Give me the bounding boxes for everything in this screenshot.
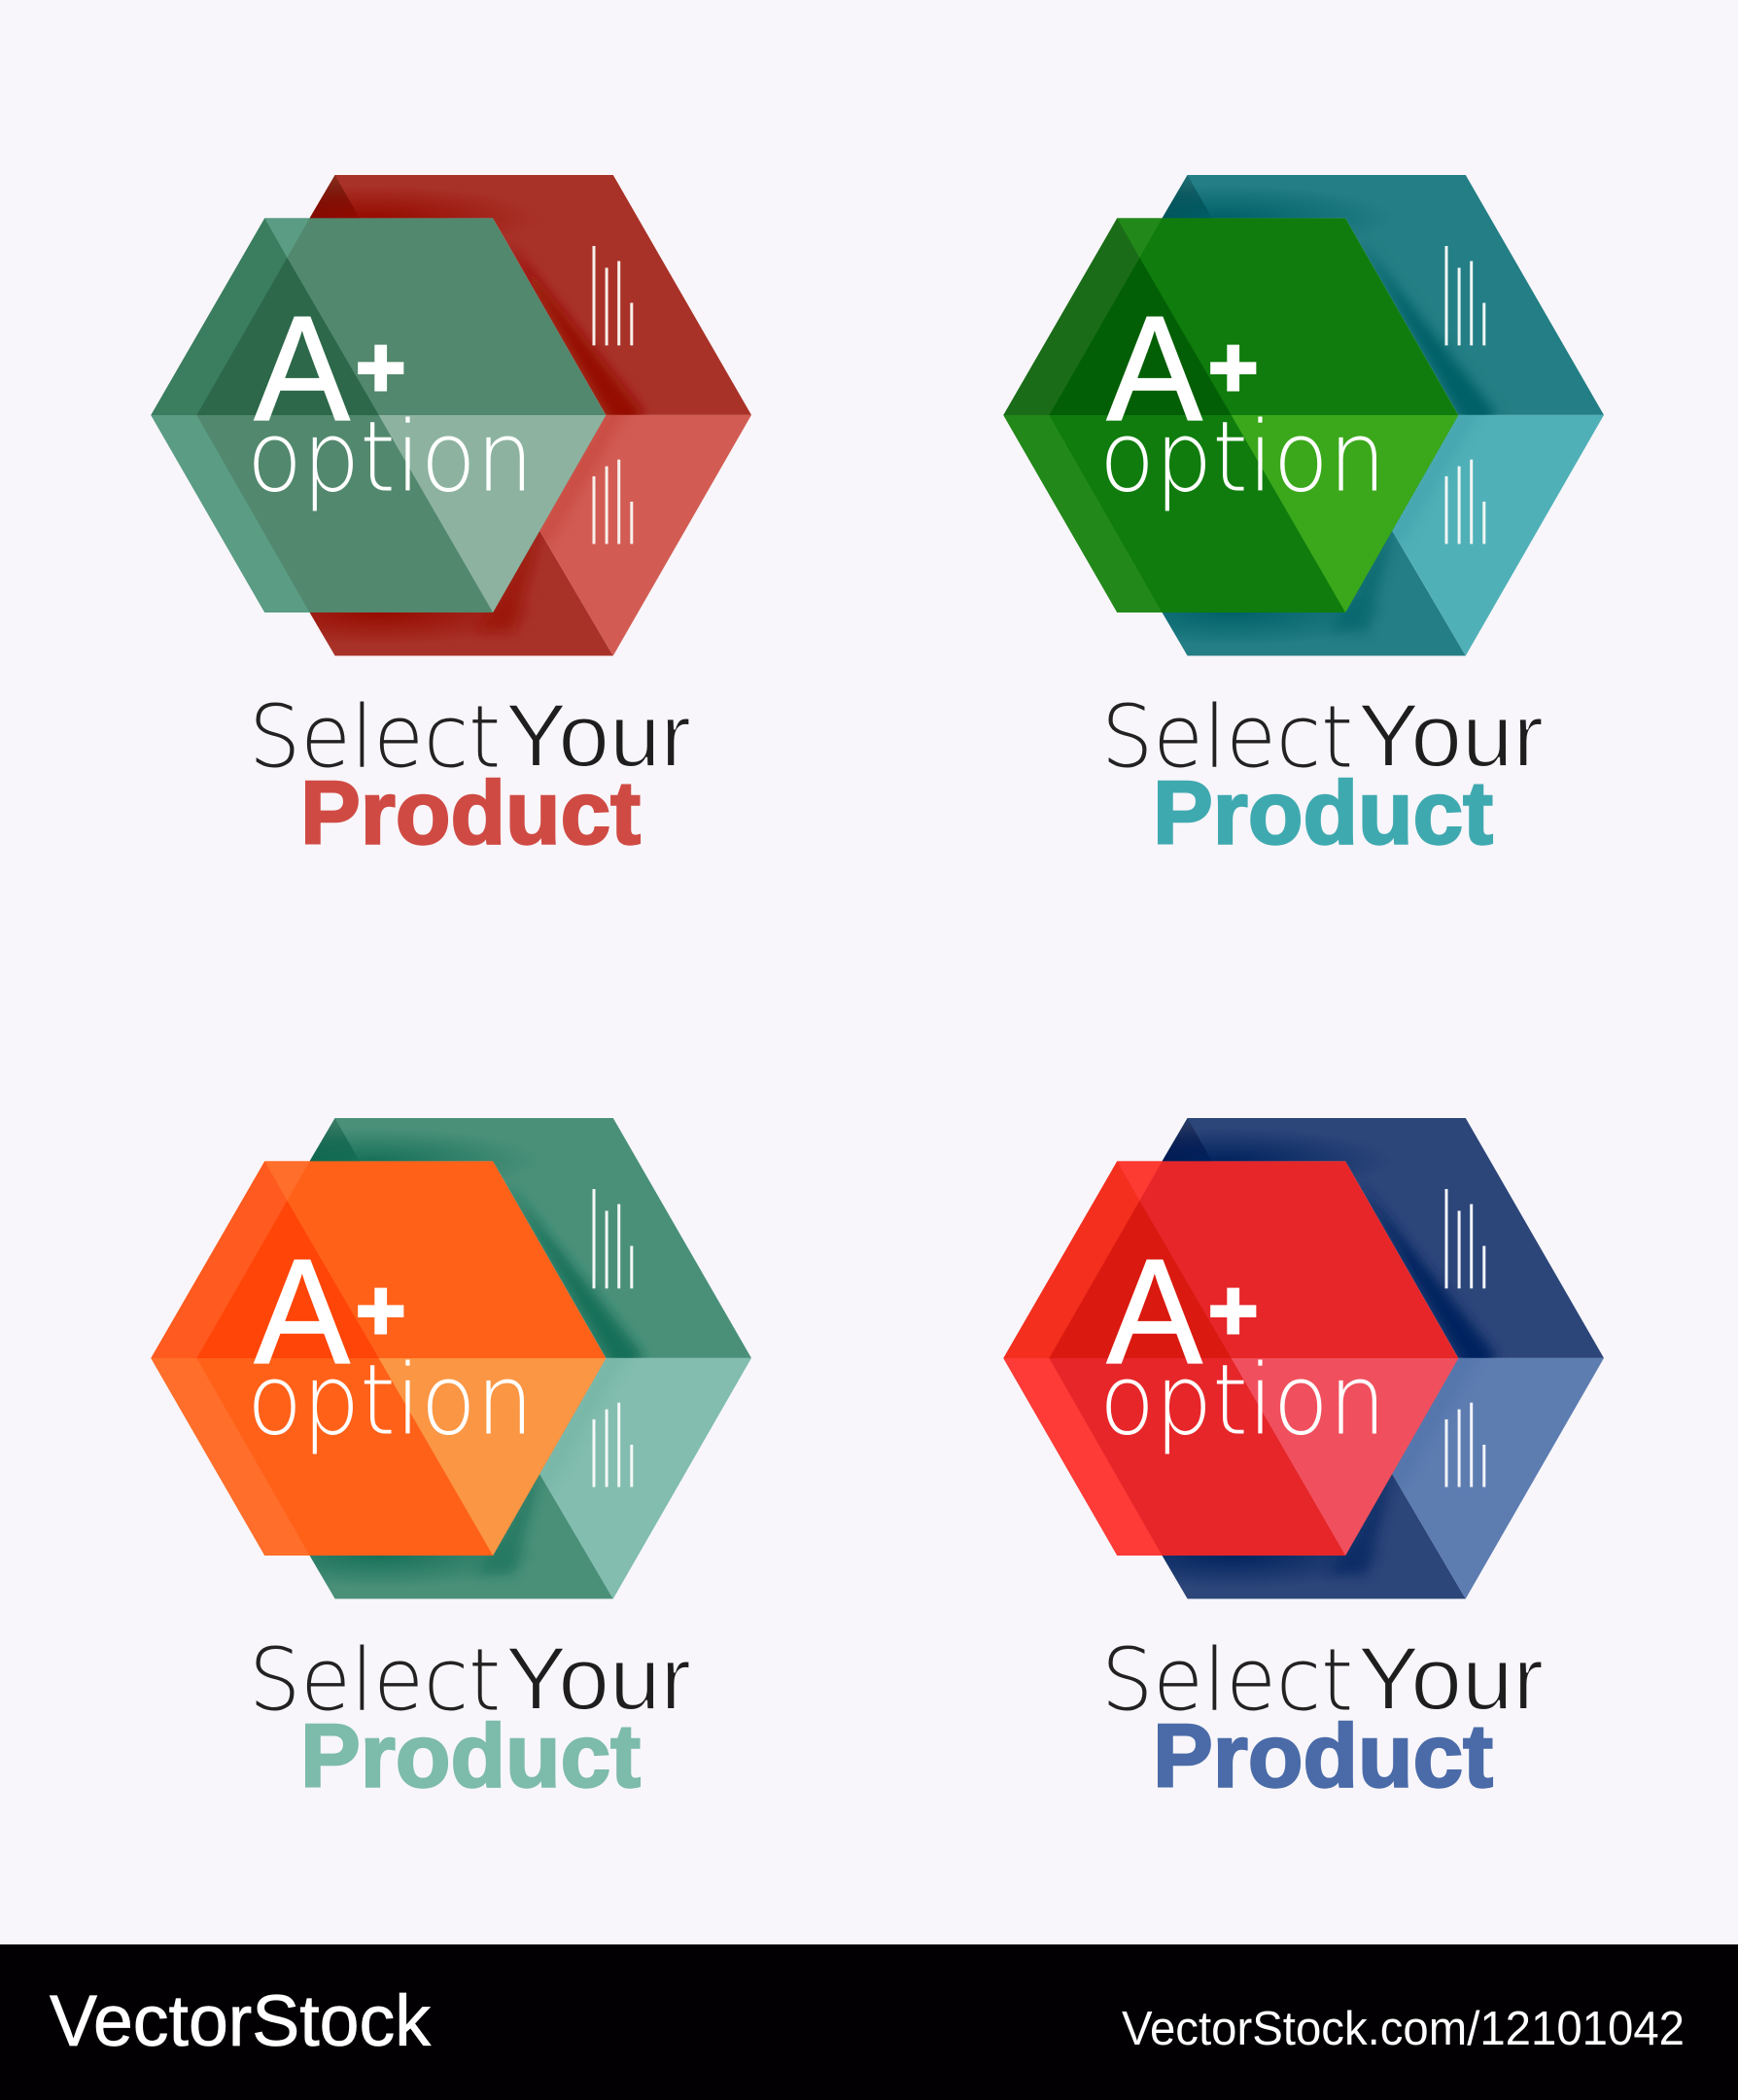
front hexagon [1003,218,1458,612]
front hexagon [151,218,606,612]
heading: Select Your [249,686,691,788]
option label: option [247,1343,534,1456]
option label: option [247,400,534,513]
icon: upper bar lines [593,1189,633,1288]
panel: red and green hexagon option [151,175,751,862]
back hexagon [1163,1118,1604,1598]
icon: lower bar lines [593,1403,633,1488]
heading: Select Your [1101,1629,1544,1731]
icon: upper bar lines [1444,1189,1485,1288]
A+ mark: A [255,1229,350,1395]
icon: lower bar lines [593,460,633,544]
icon: lower bar lines [1444,460,1485,544]
A+ mark: A [255,286,350,452]
A+ mark [255,286,405,452]
back hexagon [310,175,751,655]
A+ mark: + [356,319,405,415]
icon: lower bar lines [1444,1403,1485,1488]
option label: option [1099,400,1386,513]
heading: Select Your: Select [1101,687,1353,788]
heading: Select Your: Select [1101,1630,1353,1731]
heading: Select Your [249,1629,691,1731]
panel: teal and green hexagon option [1003,175,1604,862]
heading: Product: Product [1153,1706,1493,1805]
heading: Select Your: Select [249,687,501,788]
A+ mark: A [1107,1229,1202,1395]
A+ mark [1107,1229,1258,1395]
heading: Product: Product [1153,763,1493,862]
front hexagon [151,1161,606,1556]
A+ mark [255,1229,405,1395]
back hexagon [1163,175,1604,655]
A+ mark: + [1208,1262,1258,1358]
heading: Product: Product [300,763,641,862]
option label: option [1099,1343,1386,1456]
A+ mark: + [1208,319,1258,415]
heading: Select Your: Your [505,686,691,786]
A+ mark [1107,286,1258,452]
A+ mark: + [356,1262,405,1358]
heading: Product: Product [300,1706,641,1805]
heading: Select Your [1101,686,1544,788]
front hexagon [1003,1161,1458,1556]
icon: upper bar lines [593,246,633,345]
icon: upper bar lines [1444,246,1485,345]
footer image id: VectorStock.com/12101042 [1122,2003,1685,2055]
heading: Select Your: Your [505,1629,691,1729]
heading: Select Your: Your [1358,1629,1544,1729]
footer bar [0,1944,1738,2100]
heading: Select Your: Your [1358,686,1544,786]
panel: blue and red hexagon option [1003,1118,1604,1805]
back hexagon [310,1118,751,1598]
heading: Select Your: Select [249,1630,501,1731]
panel: green and orange hexagon option [151,1118,751,1805]
footer brand: VectorStock [50,1980,432,2061]
A+ mark: A [1107,286,1202,452]
